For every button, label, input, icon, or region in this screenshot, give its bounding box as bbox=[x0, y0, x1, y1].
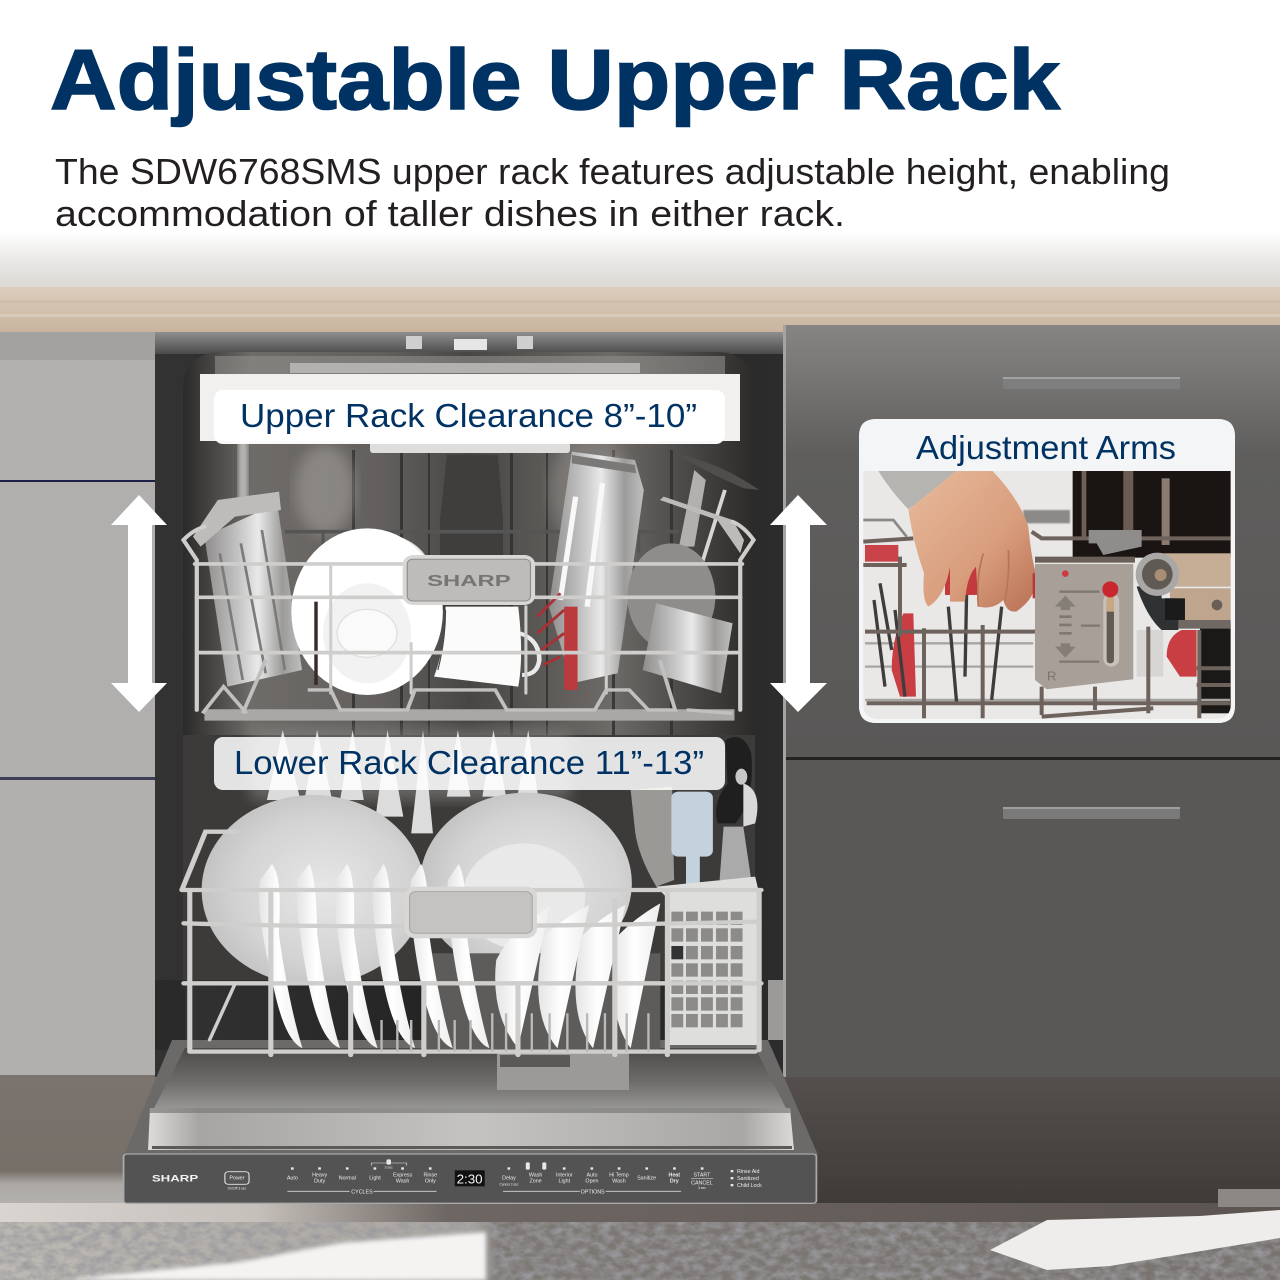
panel labels: On/Off 3 sec bbox=[228, 1187, 247, 1191]
panel labels: Only bbox=[425, 1179, 436, 1185]
lower tub bbox=[183, 735, 755, 980]
door inner bbox=[124, 1040, 818, 1155]
panel labels: Heat bbox=[668, 1173, 680, 1179]
rack handle plate with logo: SHARP bbox=[427, 571, 511, 590]
cups bbox=[434, 607, 539, 687]
leaning plates bbox=[259, 864, 489, 1048]
arrow: left vertical double-headed bbox=[111, 495, 167, 712]
adjuster plate: R bbox=[1047, 669, 1056, 684]
panel labels: Open bbox=[585, 1179, 599, 1185]
bowls bbox=[495, 903, 660, 1048]
panel labels: Child Lock bbox=[737, 1183, 762, 1189]
panel labels: Auto bbox=[586, 1173, 597, 1179]
panel labels: SHARP bbox=[152, 1173, 198, 1183]
large plates bbox=[202, 795, 425, 985]
subtitle: accommodation of taller dishes in either rack. bbox=[55, 193, 845, 234]
arrow: right vertical double-headed bbox=[770, 495, 827, 712]
upper rack with dishes bbox=[183, 452, 759, 715]
panel labels: Wash bbox=[529, 1173, 542, 1179]
panel labels: CYCLES bbox=[351, 1189, 373, 1195]
rack handle plate with logo bbox=[403, 555, 535, 605]
tall glasses bbox=[549, 452, 644, 683]
stacked plates bbox=[291, 528, 443, 695]
rack handle plate bbox=[404, 887, 537, 938]
lower rack with dishes bbox=[182, 730, 761, 1055]
tub frame bbox=[155, 332, 783, 1077]
tub back wall bbox=[183, 352, 755, 980]
panel labels: Express bbox=[393, 1173, 413, 1179]
panel labels: Sanitize bbox=[637, 1176, 656, 1182]
panel labels: Wash bbox=[612, 1179, 626, 1185]
panel labels: Light bbox=[559, 1179, 571, 1185]
panel labels: Light bbox=[369, 1176, 381, 1182]
panel: adjustment arms callout: Adjustment Arms bbox=[916, 429, 1176, 466]
label: lower rack clearance: Lower Rack Clearance 11”-13” bbox=[234, 744, 704, 781]
rack floor bbox=[203, 660, 734, 715]
panel labels: 2:30 bbox=[457, 1172, 483, 1186]
sleeve bbox=[878, 471, 956, 509]
panel labels: Duty bbox=[314, 1179, 325, 1185]
upper drawer handle bbox=[1003, 377, 1180, 389]
label: upper rack clearance bbox=[214, 390, 725, 444]
dishwasher bbox=[124, 332, 818, 1155]
panel labels: CANCEL bbox=[691, 1180, 713, 1186]
panel labels: Normal bbox=[339, 1176, 356, 1182]
panel labels: Cancel 3 sec bbox=[499, 1182, 519, 1186]
label: upper rack clearance: Upper Rack Clearance 8”-10” bbox=[240, 397, 697, 434]
latch bbox=[1089, 530, 1142, 555]
photo: hand on adjustment arm bbox=[863, 471, 1231, 720]
panel labels: OPTIONS bbox=[581, 1189, 605, 1195]
panel: right cabinets bbox=[770, 325, 1280, 1203]
adjuster plate bbox=[1035, 564, 1133, 689]
utensils bbox=[631, 737, 757, 897]
red handle bbox=[945, 567, 984, 595]
panel labels: Interior bbox=[556, 1173, 573, 1179]
panel labels: Heavy bbox=[312, 1173, 328, 1179]
panel labels: Sanitized bbox=[737, 1176, 759, 1182]
cutlery basket bbox=[656, 877, 759, 1045]
top latches bbox=[406, 336, 533, 350]
subtitle bbox=[55, 151, 1170, 234]
panel labels: START bbox=[693, 1173, 711, 1179]
floor bbox=[0, 1189, 1280, 1280]
top shelf bbox=[200, 374, 740, 441]
label: lower rack clearance bbox=[214, 737, 725, 790]
panel labels bbox=[152, 1166, 762, 1195]
panel labels: 3 sec bbox=[698, 1186, 706, 1190]
panel labels: Auto bbox=[287, 1176, 298, 1182]
panel labels: Hi Temp bbox=[609, 1173, 629, 1179]
panel labels: Rinse bbox=[423, 1173, 437, 1179]
panel labels: Wash bbox=[396, 1179, 409, 1185]
subtitle: The SDW6768SMS upper rack features adjustable height, enabling bbox=[55, 151, 1170, 192]
dark tines bbox=[874, 583, 1002, 703]
panel labels: Delay bbox=[502, 1176, 516, 1182]
control panel bbox=[124, 1154, 816, 1203]
lower drawer handle bbox=[1003, 807, 1180, 819]
tall background plates bbox=[267, 730, 538, 833]
panel labels: Zone bbox=[530, 1179, 542, 1185]
wire rack bbox=[182, 832, 761, 1055]
wire rack bbox=[183, 522, 754, 710]
panel: left cabinets bbox=[0, 332, 170, 1203]
panel labels: 3 sec bbox=[385, 1166, 393, 1170]
left glasses bbox=[193, 492, 302, 687]
panel labels: Dry bbox=[670, 1179, 679, 1185]
panel body, buttons and indicators bbox=[124, 1154, 816, 1203]
hand bbox=[908, 471, 1036, 612]
spray tower bbox=[432, 455, 510, 610]
panel labels: Power bbox=[229, 1176, 245, 1182]
wine glasses bbox=[627, 453, 759, 693]
rack wires bbox=[863, 532, 1231, 718]
gear wheel and rail bbox=[1136, 553, 1231, 630]
panel: adjustment arms callout bbox=[859, 419, 1235, 723]
lower basket background bbox=[865, 643, 1230, 700]
panel labels: Rinse Aid bbox=[737, 1169, 759, 1175]
title: Adjustable Upper Rack bbox=[50, 33, 1061, 128]
red stemware holder bbox=[537, 593, 578, 690]
back wire bbox=[285, 526, 679, 537]
